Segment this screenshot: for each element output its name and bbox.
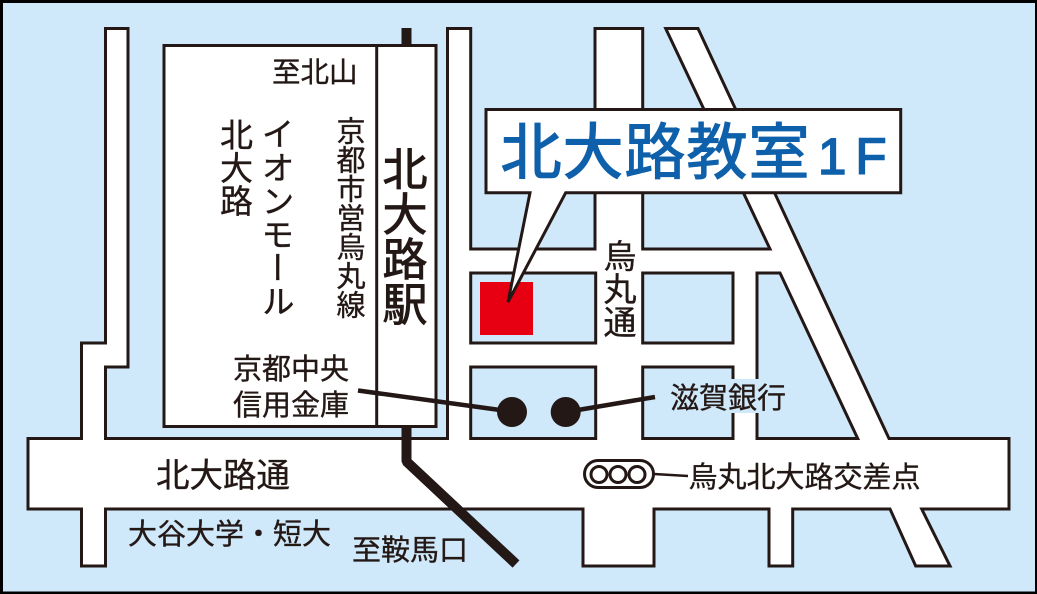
callout: Kitaoji Classroom 1F xyxy=(486,110,901,302)
label: Kyoto Chuo Shinkin Bank: 信用金庫 xyxy=(233,389,349,422)
callout leader: Shiga Bank xyxy=(578,397,655,410)
label: Karasuma Street: 烏丸通 xyxy=(599,239,636,338)
station building: Aeon Mall and Kitaoji Station xyxy=(164,46,436,426)
label: Kyoto Chuo Shinkin Bank xyxy=(233,353,349,422)
label: Aeon Mall: イオンモール xyxy=(257,117,294,318)
label: to Kuramaguchi: 至鞍馬口 xyxy=(352,534,468,567)
callout leader: Kyoto Chuo Shinkin Bank xyxy=(358,390,500,410)
traffic signal icon xyxy=(584,460,688,488)
label: Kitaoji (Aeon Mall): 北大路 xyxy=(216,118,252,217)
bank marker: Kyoto Chuo Shinkin xyxy=(497,397,527,427)
label: Karasuma Kitaoji intersection: 烏丸北大路交差点 xyxy=(688,461,921,494)
callout: Kitaoji Classroom 1F: 北大路教室 xyxy=(500,119,810,188)
callout: Kitaoji Classroom 1F: 1F xyxy=(818,128,896,185)
label: Otani University: 大谷大学・短大 xyxy=(128,518,331,551)
red square: classroom location xyxy=(480,282,533,335)
label: to Kitayama: 至北山 xyxy=(272,57,358,89)
bank marker: Shiga Bank xyxy=(551,397,581,427)
label: Kyoto Chuo Shinkin Bank: 京都中央 xyxy=(233,353,349,386)
railway line: Karasuma subway xyxy=(406,28,516,564)
label: Kitaoji Street: 北大路通 xyxy=(156,458,290,495)
label: Kyoto Municipal Subway Karasuma Line: 京都市営烏丸線 xyxy=(332,116,366,319)
label: Shiga Bank: 滋賀銀行 xyxy=(670,382,786,415)
label: Kitaoji Station: 北大路駅 xyxy=(376,146,426,326)
